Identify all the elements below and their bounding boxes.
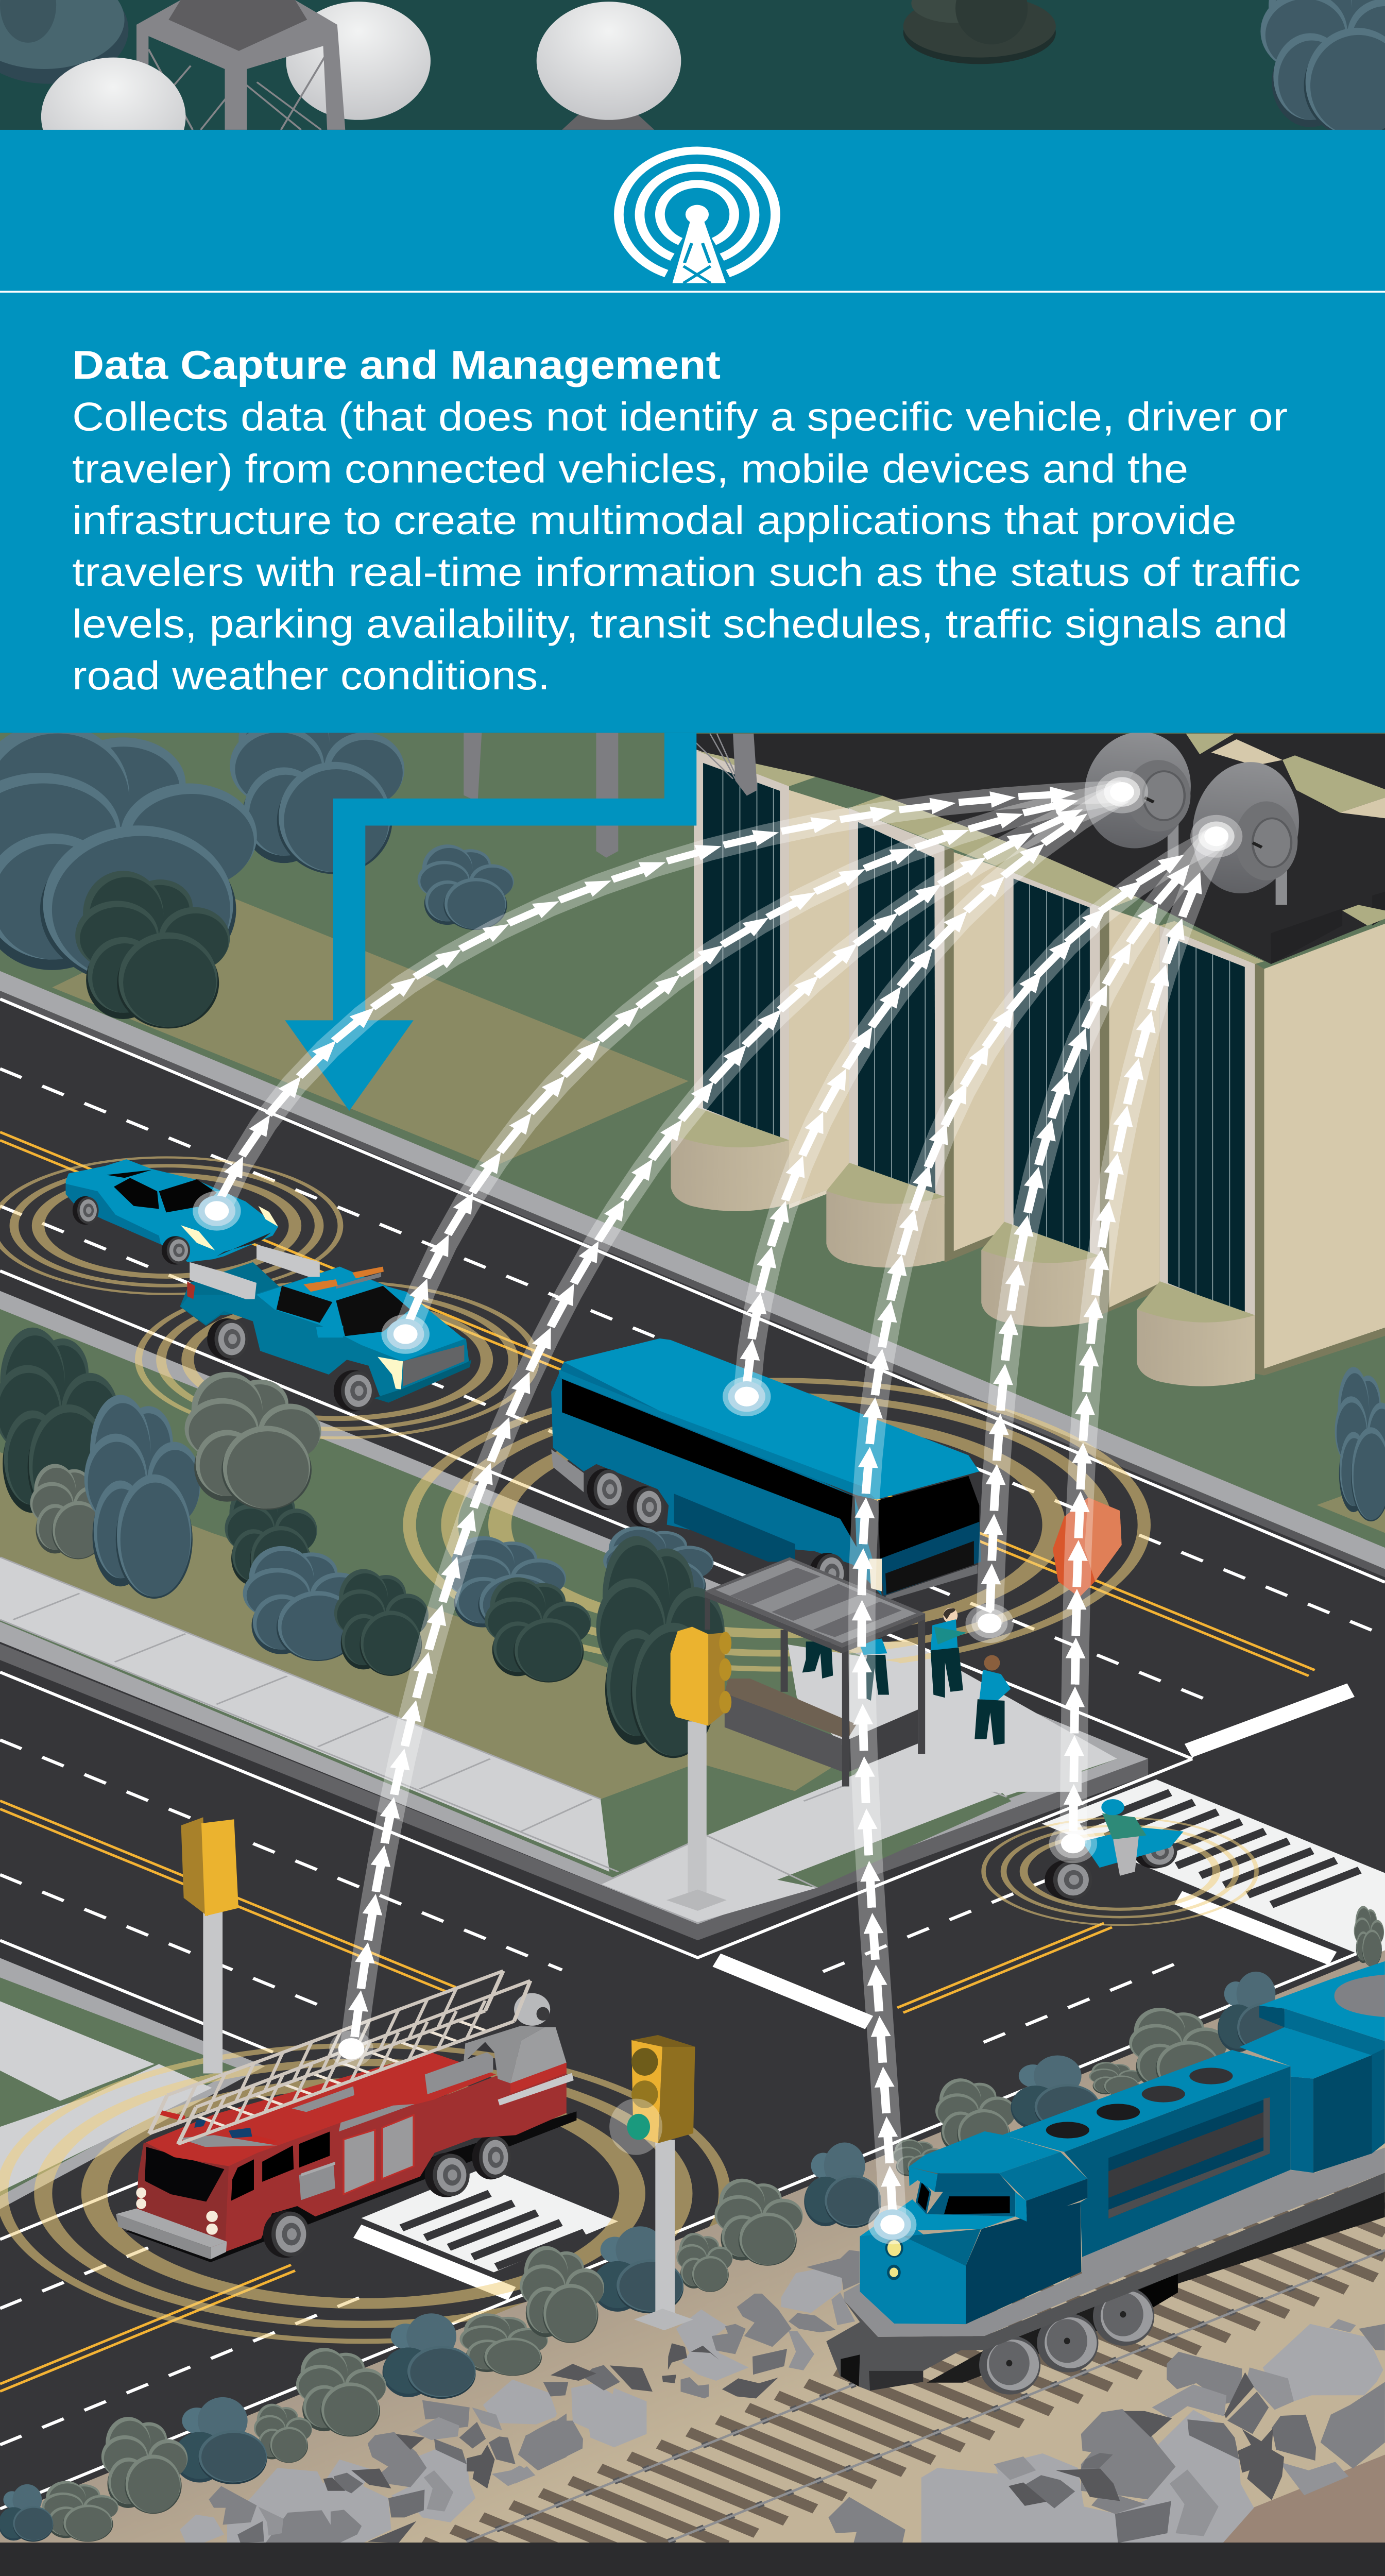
tree: small blue — [418, 844, 514, 930]
arc: train to dish — [862, 837, 1217, 2225]
fin caps — [696, 751, 1264, 964]
pickup truck with equipment — [180, 1244, 471, 1412]
glow: pickup — [381, 1314, 430, 1354]
glow: left dish — [1096, 771, 1148, 814]
people behind shelter — [802, 1638, 889, 1701]
signal rings — [0, 1157, 1257, 2341]
long hood — [1003, 2050, 1291, 2257]
car — [66, 1159, 278, 1264]
glow: right dish — [1190, 815, 1242, 858]
lawn: olive diamond — [52, 899, 689, 1166]
roof strips — [1186, 734, 1385, 926]
locomotive — [826, 1961, 1385, 2395]
illustrated street scene — [0, 690, 1385, 2557]
olive planting strip — [0, 1452, 839, 1799]
glow: bus — [723, 1377, 771, 1416]
body text: infrastructure to create multimodal applications that provide — [72, 498, 1237, 543]
tree: top right — [1260, 0, 1385, 138]
arc: traveler to dish — [989, 837, 1216, 1623]
body text: traveler) from connected vehicles, mobile devices and the — [72, 447, 1188, 492]
arc: fire truck to dish — [353, 793, 1122, 2049]
icon: radio tower — [619, 150, 775, 283]
rings: car — [0, 1157, 340, 1294]
rings: pickup — [139, 1282, 536, 1438]
top road — [0, 971, 1385, 2530]
arc: motorcycle to dish — [1073, 837, 1216, 1843]
glow: traveler device — [966, 1604, 1014, 1643]
traffic light: centre — [671, 1627, 731, 1900]
turret — [464, 1993, 574, 2106]
rocks: left cluster — [180, 2380, 567, 2543]
rings: fire truck — [2, 2045, 725, 2341]
top illustration strip — [0, 0, 1385, 176]
bus — [551, 1338, 981, 1600]
facade bays — [694, 749, 1264, 1376]
tree: dark pine — [75, 871, 230, 1028]
glow: fire truck — [329, 2031, 373, 2067]
traffic light: left — [181, 1817, 238, 2073]
stop sign — [1053, 1497, 1122, 1598]
tree: top left — [0, 0, 128, 84]
bus shelter with people — [705, 1557, 1082, 1792]
motorcycle with rider — [1045, 1799, 1184, 1900]
rails — [467, 2250, 1385, 2542]
ladder — [149, 1971, 531, 2144]
tree: large blue left — [230, 690, 404, 874]
person in blue jacket — [974, 1655, 1011, 1745]
blue connector arrow from panel — [285, 733, 696, 1111]
lower left block — [0, 1958, 265, 2209]
rocks: right cluster — [921, 2319, 1385, 2543]
dish: right — [1185, 758, 1307, 905]
arc: car to dish — [217, 791, 1122, 1211]
dome: left — [41, 58, 185, 176]
trees: along rail line — [0, 1906, 1384, 2542]
rings: motorcycle — [984, 1818, 1257, 1925]
rings: bus — [409, 1380, 1144, 1669]
crosswalk: right — [1042, 1780, 1385, 1965]
trees: median — [0, 1328, 1385, 1758]
person with device — [931, 1608, 967, 1698]
engine section — [1239, 1961, 1385, 2173]
antenna leg and cables — [696, 734, 757, 795]
bush: top centre — [903, 0, 1056, 64]
body text: road weather conditions. — [72, 653, 550, 698]
roof — [696, 734, 1385, 964]
bottom dark band — [0, 2543, 1385, 2576]
glow: motorcycle — [1049, 1824, 1097, 1863]
dome: middle — [286, 2, 431, 120]
traffic light: near fire truck — [609, 2035, 695, 2330]
right wall — [1264, 924, 1385, 1368]
cab nose — [860, 2199, 1082, 2324]
sidewalk — [0, 1557, 1117, 1922]
building — [671, 727, 1385, 1386]
fire truck — [116, 1971, 576, 2262]
shelter roof — [705, 1557, 925, 1653]
traffic light base: centre — [666, 1889, 727, 1911]
arc: pickup to dish — [405, 792, 1123, 1334]
heading: Data Capture and Management — [72, 343, 721, 387]
railway sleepers — [423, 2177, 1385, 2557]
tower legs — [464, 733, 618, 858]
dish: left — [1078, 727, 1198, 859]
signal glows — [193, 771, 1242, 2244]
body text: travelers with real-time information such as the status of traffic — [72, 550, 1301, 595]
windows — [703, 763, 1245, 1313]
ground and rail bed — [0, 1950, 1385, 2557]
roof light bars — [159, 2110, 278, 2147]
data arcs with arrows — [217, 791, 1217, 2225]
sidewalk under shelter — [788, 1645, 1082, 1792]
tree: largest blue left — [0, 723, 257, 986]
tower: top left — [136, 0, 345, 130]
cab and windows — [909, 2131, 1087, 2222]
headlights — [885, 2239, 903, 2280]
text panel — [0, 130, 1385, 733]
body text — [72, 395, 1301, 698]
dome: right on stand — [537, 2, 681, 130]
arc: bus to dish — [747, 792, 1122, 1397]
rocks: centre cluster — [515, 2250, 860, 2484]
rocks: lower bridge — [828, 2497, 905, 2543]
crosswalk: firetruck — [361, 2167, 618, 2272]
planters — [671, 1106, 1255, 1386]
glow: train — [868, 2205, 916, 2244]
central median block with sidewalk — [0, 1291, 1148, 1940]
divider — [0, 291, 1385, 293]
glow: car — [193, 1191, 241, 1231]
